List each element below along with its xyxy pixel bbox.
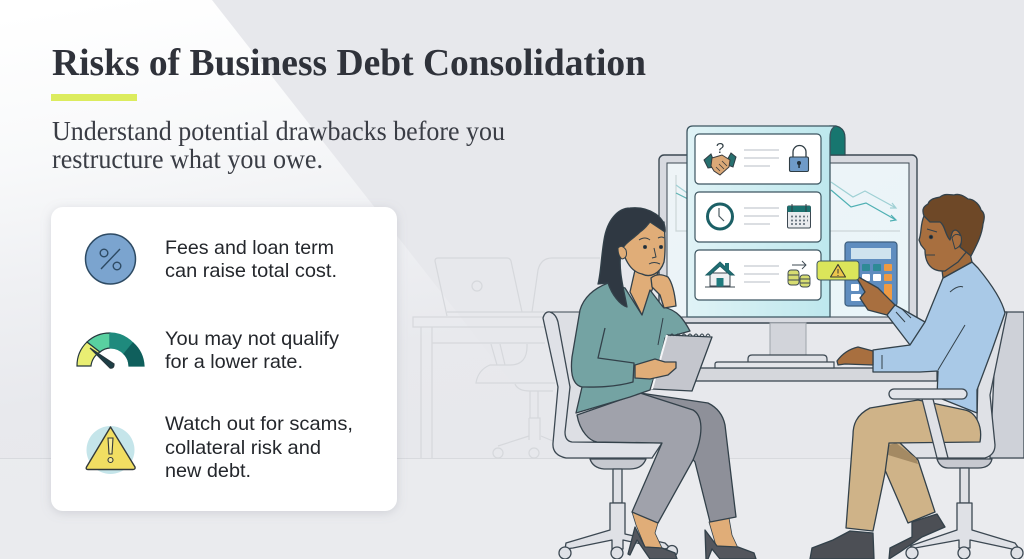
front thigh bbox=[577, 393, 701, 523]
front foot bbox=[632, 512, 662, 548]
icon: coins and arrow bbox=[788, 261, 810, 287]
sweater bbox=[571, 283, 690, 413]
desk bbox=[690, 368, 937, 381]
calculator bbox=[845, 242, 897, 306]
keyboard bbox=[715, 362, 834, 368]
man bbox=[810, 194, 1005, 559]
text: scams: collateral risk and bbox=[165, 437, 321, 459]
text: fees bbox=[165, 237, 337, 282]
woman bbox=[571, 208, 756, 559]
face details bbox=[926, 229, 937, 255]
text: qualify: for a lower rate. bbox=[165, 351, 303, 373]
text: scams: Watch out for scams, bbox=[165, 413, 353, 435]
face bbox=[919, 210, 970, 271]
panel: risk list bbox=[51, 207, 397, 511]
subtitle: restructure what you owe. bbox=[52, 144, 323, 174]
text: fees: Fees and loan term bbox=[165, 237, 334, 259]
notepad bbox=[652, 334, 712, 391]
icon: clock bbox=[708, 204, 732, 229]
background sketch: empty desk and chair bbox=[413, 258, 600, 458]
hair bbox=[598, 208, 665, 307]
pointing hand bbox=[855, 275, 895, 315]
screen chart bbox=[676, 175, 900, 231]
monitor bbox=[659, 155, 917, 368]
card: time bbox=[695, 192, 821, 242]
subtitle: Understand potential drawbacks before you bbox=[52, 116, 505, 146]
front shoe bbox=[628, 527, 677, 559]
note hand bbox=[635, 359, 676, 379]
back shoe bbox=[889, 514, 945, 559]
monitor stand bbox=[770, 323, 806, 356]
ear bbox=[952, 234, 961, 249]
icon: gauge bbox=[77, 333, 144, 368]
back leg bbox=[640, 393, 736, 522]
ear bbox=[618, 246, 626, 259]
chair: man bbox=[895, 312, 1024, 458]
back shoe bbox=[705, 530, 756, 559]
title accent bar bbox=[51, 94, 137, 101]
chair arm and base: man bbox=[889, 389, 1023, 559]
icon: house bbox=[705, 262, 735, 287]
face bbox=[622, 222, 665, 276]
icon: calendar bbox=[788, 204, 810, 228]
icon: lock bbox=[790, 146, 808, 172]
keyboard hand bbox=[837, 347, 873, 365]
text: scams bbox=[165, 413, 353, 482]
alert tag bbox=[817, 261, 859, 280]
icon: percent bbox=[86, 234, 136, 284]
chair: woman bbox=[543, 312, 678, 559]
neck bbox=[630, 270, 658, 315]
panel: document bbox=[687, 126, 836, 317]
chin hand bbox=[651, 275, 676, 308]
card: assets bbox=[695, 250, 821, 300]
icon: handshake: ? bbox=[716, 140, 724, 157]
text: qualify: You may not qualify bbox=[165, 328, 339, 350]
title: Risks of Business Debt Consolidation bbox=[52, 42, 646, 84]
back foot bbox=[709, 518, 738, 549]
icon: warning bbox=[86, 426, 135, 474]
text: fees: can raise total cost. bbox=[165, 260, 337, 282]
text: qualify bbox=[165, 328, 339, 373]
hair bbox=[923, 194, 984, 256]
shirt body bbox=[873, 262, 1005, 413]
eyes and mouth bbox=[639, 237, 664, 264]
rear leg bbox=[880, 440, 935, 523]
text: scams: new debt. bbox=[165, 460, 251, 482]
subtitle bbox=[52, 116, 505, 174]
card: terms bbox=[695, 134, 821, 184]
thigh bbox=[846, 400, 981, 531]
front shoe bbox=[810, 531, 874, 559]
neck bbox=[941, 245, 972, 278]
document tab bbox=[830, 126, 845, 155]
